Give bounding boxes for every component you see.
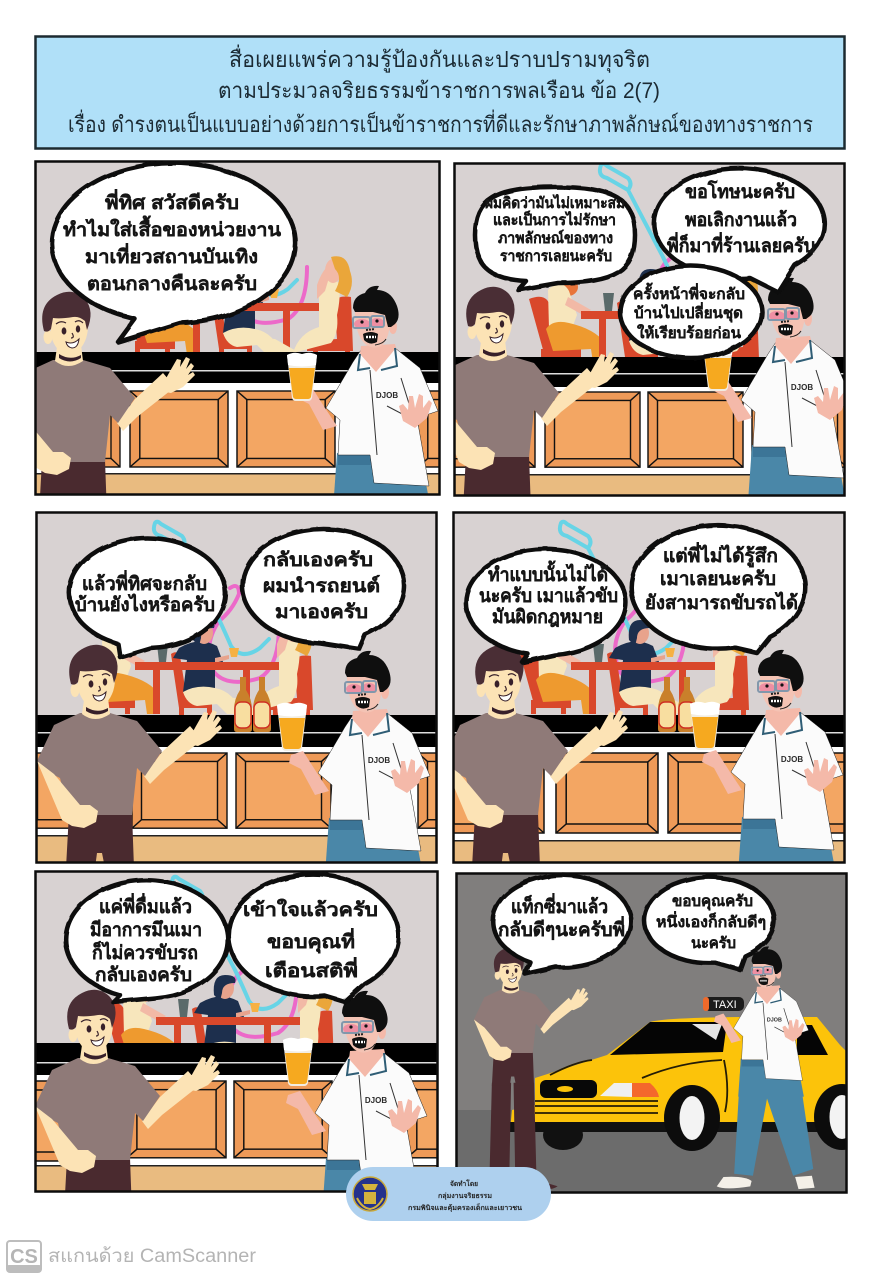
panel: drunk driving warning [452, 511, 846, 864]
organisation credit pill [346, 1167, 551, 1221]
speech bubble: greeting: ตอนกลางคืนละครับ [87, 273, 257, 295]
speech bubble: apology: ขอโทษนะครับ [685, 180, 795, 203]
title banner [36, 36, 844, 148]
speech bubble: not appropriate: ผมคิดว่ามันไม่เหมาะสม [485, 193, 625, 212]
panel: greeting at the bar [34, 160, 441, 496]
officer in white DJOB shirt [303, 286, 438, 494]
speech bubble: should not drive: มีอาการมึนเมา [90, 919, 202, 941]
speech bubble: taxi is here: กลับดีๆนะครับพี่ [498, 916, 625, 941]
speech bubble: taxi is here [493, 875, 631, 974]
icon: CS logo [7, 1241, 41, 1272]
officer in white DJOB shirt [286, 990, 428, 1190]
yellow taxi: TAXI [713, 999, 737, 1011]
speech bubble: next time: ให้เรียบร้อยก่อน [637, 324, 742, 342]
glass of beer [287, 353, 317, 401]
title banner: สื่อเผยแพร่ความรู้ป้องกันและปราบปรามทุจริต [229, 44, 650, 73]
speech bubble: apology [654, 168, 824, 292]
speech bubble: question: แล้วพี่ทิศจะกลับ [82, 570, 207, 595]
speech bubble: should not drive [66, 880, 228, 1002]
beer bottles [234, 677, 271, 732]
speech bubble: illegal: มันผิดกฎหมาย [492, 607, 603, 628]
speech bubble: illegal [466, 549, 626, 662]
speech bubble: driving myself [242, 529, 404, 649]
speech bubble: driving myself: ผมนำรถยนต์ [263, 575, 380, 597]
officer in white DJOB shirt [714, 278, 844, 494]
speech bubble: not appropriate [475, 187, 635, 290]
beer bottles [658, 677, 696, 732]
speech bubble: thanks: เข้าใจแล้วครับ [243, 898, 378, 921]
speech bubble: not feeling drunk [631, 525, 805, 653]
title banner: ตามประมวลจริยธรรมข้าราชการพลเรือน ข้อ 2(7) [218, 78, 660, 103]
man in brown shirt [474, 947, 589, 1190]
speech bubble: thanks: เตือนสติพี่ [265, 957, 358, 982]
speech bubble: not feeling drunk: แต่พี่ไม่ได้รู้สึก [663, 542, 778, 568]
speech bubble: illegal: นะครับ เมาแล้วขับ [479, 585, 618, 607]
speech bubble: driving myself: มาเองครับ [275, 602, 368, 623]
man in brown shirt [37, 645, 222, 868]
speech bubble: greeting: มาเที่ยวสถานบันเทิง [85, 243, 258, 268]
speech bubble: not feeling drunk: เมาเลยนะครับ [660, 569, 776, 590]
speech bubble: thanks [228, 875, 398, 1002]
CamScanner watermark: สแกนด้วย CamScanner [48, 1246, 257, 1267]
speech bubble: apology: พี่ก็มาที่ร้านเลยครับ [667, 232, 815, 257]
glass of beer [283, 1038, 313, 1086]
speech bubble: not feeling drunk: ยังสามารถขับรถได้ [645, 591, 798, 614]
speech bubble: thanks: ขอบคุณที่ [267, 928, 355, 954]
panel: uniform discussion [434, 163, 853, 510]
speech bubble: thank you: หนึ่งเองก็กลับดีๆ [656, 911, 766, 931]
speech bubble: greeting: พี่ทิศ สวัสดีครับ [105, 189, 239, 214]
speech bubble: question [69, 538, 225, 657]
CamScanner watermark [7, 1241, 257, 1272]
icon: department emblem [353, 1177, 387, 1211]
man in brown shirt [36, 990, 220, 1190]
speech bubble: greeting [52, 163, 296, 342]
speech bubble: question: บ้านยังไงหรือครับ [75, 593, 215, 616]
organisation credit pill: กรมพินิจและคุ้มครองเด็กและเยาวชน [408, 1203, 522, 1212]
officer in white DJOB shirt [714, 946, 815, 1189]
speech bubble: taxi is here: แท็กซี่มาแล้ว [511, 893, 608, 918]
officer in white DJOB shirt [289, 651, 430, 875]
speech bubble: not appropriate: และเป็นการไม่รักษา [493, 210, 616, 229]
speech bubble: thank you [644, 877, 774, 970]
speech bubble: next time: บ้านไปเปลี่ยนชุด [634, 302, 743, 323]
glass of beer [690, 702, 720, 750]
panel: how to get home [35, 511, 438, 864]
organisation credit pill: จัดทำโดย [450, 1179, 478, 1188]
speech bubble: thank you: นะครับ [691, 935, 736, 952]
officer in white DJOB shirt [702, 650, 843, 874]
speech bubble: not appropriate: ราชการเลยนะครับ [500, 248, 612, 265]
man in brown shirt [443, 645, 628, 868]
speech bubble: apology: พอเลิกงานแล้ว [685, 209, 797, 231]
glass of beer [277, 703, 307, 751]
speech bubble: should not drive: กลับเองครับ [95, 965, 192, 986]
organisation credit pill: กลุ่มงานจริยธรรม [438, 1192, 492, 1200]
speech bubble: greeting: ทำไมใส่เสื้อของหน่วยงาน [63, 215, 281, 241]
speech bubble: illegal: ทำแบบนั้นไม่ได้ [488, 560, 608, 586]
glass of beer [704, 352, 732, 391]
panel: taxi [456, 873, 870, 1193]
icon: CS logo: CS [10, 1246, 38, 1268]
speech bubble: should not drive: ก็ไม่ควรขับรถ [92, 940, 198, 964]
panel: understanding [34, 870, 439, 1193]
yellow taxi [510, 997, 870, 1151]
man in brown shirt [456, 286, 619, 494]
speech bubble: next time: ครั้งหน้าพี่จะกลับ [633, 282, 745, 303]
speech bubble: next time [620, 266, 762, 358]
speech bubble: driving myself: กลับเองครับ [263, 550, 373, 571]
speech bubble: thank you: ขอบคุณครับ [672, 893, 753, 911]
speech bubble: not appropriate: ภาพลักษณ์ของทาง [498, 229, 613, 247]
speech bubble: should not drive: แค่พี่ดื่มแล้ว [99, 893, 192, 918]
man in brown shirt [36, 292, 195, 494]
